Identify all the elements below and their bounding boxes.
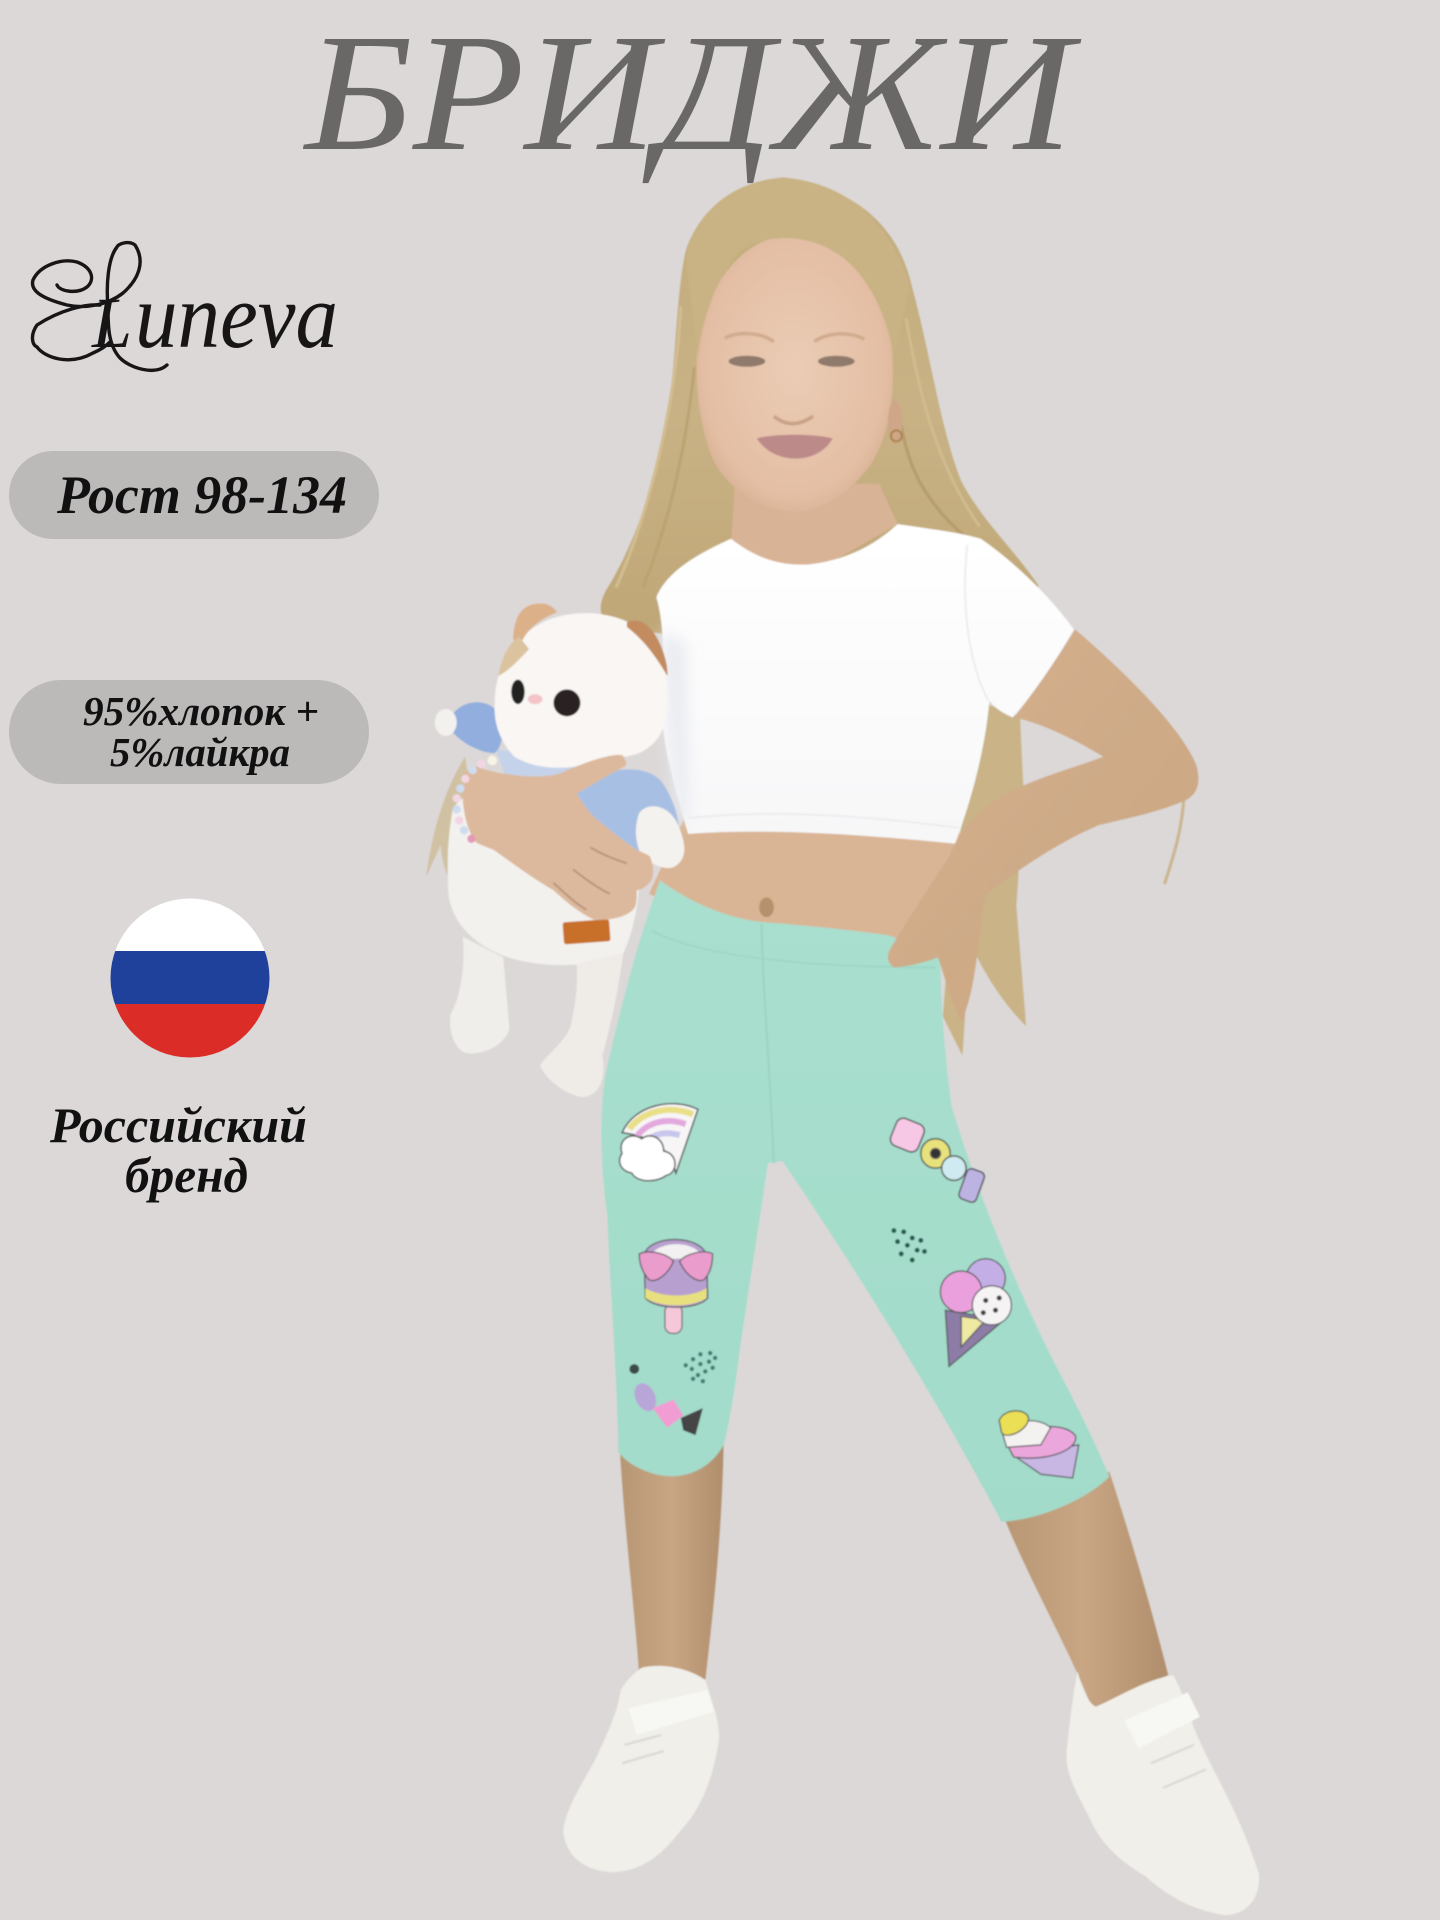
shirt hem [689,814,959,828]
midriff [649,820,962,967]
bracelet [453,756,497,843]
sticker: cupcake cone [999,1411,1079,1478]
waistband line [651,931,936,967]
cat left leg [450,937,509,1053]
brand caption [49,1097,307,1203]
pill text: fabric line 1: 95%хлопок + [83,688,319,734]
sticker: rainbow [620,1104,698,1181]
sticker: popsicle [639,1239,713,1333]
cat eye left [511,680,525,704]
title: БРИДЖИ [303,0,1082,186]
sticker: candy [629,1364,703,1435]
pill: height [9,451,379,539]
logo swash [32,243,167,370]
cat patch [498,637,529,676]
hair lower right [943,704,1026,1056]
hair back [601,178,1038,637]
sticker: dark dots lower [684,1351,717,1383]
right lower leg [1000,1472,1168,1708]
right shoe strap [1124,1692,1200,1749]
nose [774,416,813,424]
cat left sleeve [453,702,502,753]
brand caption: бренд [125,1147,248,1203]
hair wisp right [1164,796,1184,884]
brow right [814,334,864,342]
right shoe [1066,1671,1259,1915]
sticker: ice cream cone [940,1259,1011,1367]
brow left [725,334,774,342]
plush cat [435,603,684,1097]
cat left paw tip [435,709,457,736]
ear right [888,400,902,444]
right shoe laces [1151,1745,1206,1788]
leggings [601,880,1109,1522]
earring [891,430,902,441]
mouth [757,435,833,459]
cat right sleeve [573,769,679,852]
hair top [686,178,910,355]
cat tag [563,919,611,944]
cat body [448,771,640,965]
left hand holding cat [462,755,653,920]
leggings center seam [762,924,774,1163]
logo: Luneva: L [91,283,132,363]
hair strands [616,306,980,588]
eye right [818,356,855,367]
icon: Russian flag [110,898,270,1058]
navel [759,898,774,917]
cat head [495,613,668,768]
photo: girl with plush cat [426,178,1259,1915]
left shoe [563,1666,719,1872]
shirt [656,524,1074,844]
cat nose [528,694,542,704]
pill: fabric composition [9,680,369,784]
shirt shadow near cat [661,631,688,820]
right arm [888,629,1198,1021]
cat ear right [627,621,668,676]
left lower leg [620,1439,724,1680]
sticker: dark dots upper [891,1228,927,1262]
left shoe laces [622,1735,664,1763]
cat sweater center [496,749,588,796]
neck [731,484,898,576]
sticker: KOOL lettering [888,1116,986,1204]
pill text: fabric line 2: 5%лайкра [110,729,290,775]
cat right leg [540,953,623,1097]
cat ear left [513,603,557,647]
logo: Luneva: uneva [135,265,338,367]
cat eye right [553,689,580,716]
brand caption: Российский [49,1097,307,1153]
rainbow cloud [620,1136,675,1181]
hair wisp left [426,757,470,884]
cat right paw [636,806,684,868]
pill text: height range: Рост 98-134 [56,465,347,525]
logo: Luneva [32,243,338,370]
eye left [729,356,765,367]
finger creases [553,847,627,910]
left shoe strap [628,1690,714,1735]
face [686,178,910,512]
sleeve seam [965,545,988,700]
